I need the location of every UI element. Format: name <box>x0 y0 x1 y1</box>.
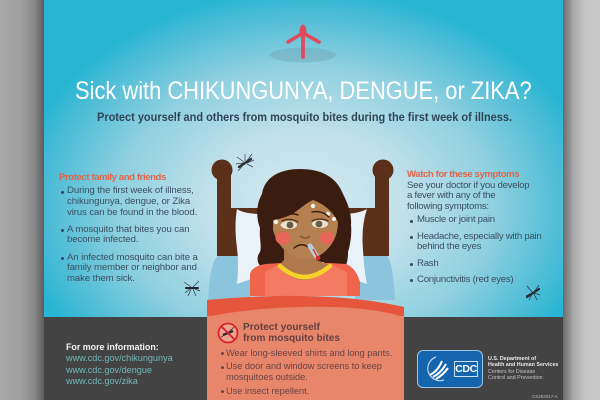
icon: HHS eagle <box>427 356 449 382</box>
icon: mosquito near headboard <box>236 154 254 172</box>
bullet list: family: virus can be found in the blood. <box>67 207 197 218</box>
text: department names: Health and Human Services <box>488 362 558 368</box>
links: www.cdc.gov/zika <box>66 376 138 386</box>
hair <box>257 169 351 275</box>
text: see your doctor <box>407 180 530 212</box>
bullet list: family: family member or neighbor and <box>67 262 197 273</box>
text: see your doctor: following symptoms: <box>407 201 489 212</box>
shirt <box>250 263 360 296</box>
bullet list: symptoms: Conjunctivitis (red eyes) <box>417 274 513 285</box>
title: Sick with CHIKUNGUNYA, DENGUE, or ZIKA? <box>75 77 532 105</box>
links <box>66 353 173 386</box>
text: department names: Control and Prevention <box>488 375 543 381</box>
panel: more information <box>66 342 173 386</box>
panel: protect yourself <box>207 316 404 400</box>
bullet list: family: During the first week of illness, <box>67 185 194 196</box>
links: www.cdc.gov/chikungunya <box>66 353 173 363</box>
headboard <box>212 160 394 256</box>
bullet list: family: An infected mosquito can bite a <box>67 252 198 263</box>
pillow <box>236 209 367 284</box>
thermometer <box>310 246 317 257</box>
links: www.cdc.gov/dengue <box>66 365 152 375</box>
panel: protect family and friends <box>59 172 198 284</box>
cheeks <box>276 232 290 244</box>
eyes <box>281 221 297 229</box>
panel: watch for symptoms <box>407 169 542 285</box>
poster sky panel <box>44 0 563 318</box>
bullet list: symptoms: behind the eyes <box>417 241 481 252</box>
text: department names: U.S. Department of <box>488 356 536 362</box>
necklace collar <box>280 266 330 277</box>
subtitle: Protect yourself and others from mosquito bites during the first week of illness. <box>97 110 512 124</box>
icon: mosquito right <box>526 284 540 300</box>
text: publication code: CS262917-A <box>532 394 558 399</box>
illustration: sick girl in bed <box>207 160 404 316</box>
heading: more information: For more information: <box>66 342 159 352</box>
neck <box>279 248 331 280</box>
heading: protect yourself <box>243 322 340 344</box>
bullet list: protection: Use insect repellent. <box>226 386 309 396</box>
page background <box>0 0 44 400</box>
bullet list: symptoms: Rash <box>417 258 438 269</box>
logo: CDC <box>417 350 483 388</box>
text: CDC <box>454 361 478 377</box>
heading: protect yourself: from mosquito bites <box>243 333 340 344</box>
bullet list: family: A mosquito that bites you can <box>67 224 189 235</box>
bullet list: family: chikungunya, dengue, or Zika <box>67 196 190 207</box>
footer band <box>44 317 563 400</box>
bullet list: family: make them sick. <box>67 273 135 284</box>
bullet list: symptoms <box>410 214 542 285</box>
bullet list: protection: mosquitoes outside. <box>226 372 308 382</box>
bullet list: symptoms: Headache, especially with pain <box>417 231 542 242</box>
blue mattress sides <box>208 256 250 300</box>
brows, nose, mouth <box>280 212 329 248</box>
text: CDC: CDC <box>455 363 477 375</box>
bullet list: symptoms: Muscle or joint pain <box>417 214 495 225</box>
heading: protect yourself: Protect yourself <box>243 322 320 332</box>
text: see your doctor: a fever with any of the <box>407 190 495 201</box>
icon: mosquito at top <box>270 16 336 62</box>
icon: mosquito left <box>184 280 200 296</box>
heading: watch for symptoms: Watch for these symptoms <box>407 169 519 180</box>
bullet list: protection <box>221 348 392 396</box>
text: department names <box>488 356 558 381</box>
text: department names: Centers for Disease <box>488 369 535 375</box>
heading: protect family: Protect family and friends <box>59 172 166 183</box>
bullet list: protection: Wear long-sleeved shirts and long pants. <box>226 348 392 358</box>
bullet list: family: become infected. <box>67 234 138 245</box>
blanket <box>207 296 404 320</box>
bullet list: protection: Use door and window screens to keep <box>226 361 382 371</box>
icon: no mosquito <box>218 322 238 344</box>
text: see your doctor: See your doctor if you develop <box>407 180 529 191</box>
fever spots <box>274 204 336 226</box>
bullet list: family <box>61 185 198 284</box>
face <box>273 200 338 259</box>
